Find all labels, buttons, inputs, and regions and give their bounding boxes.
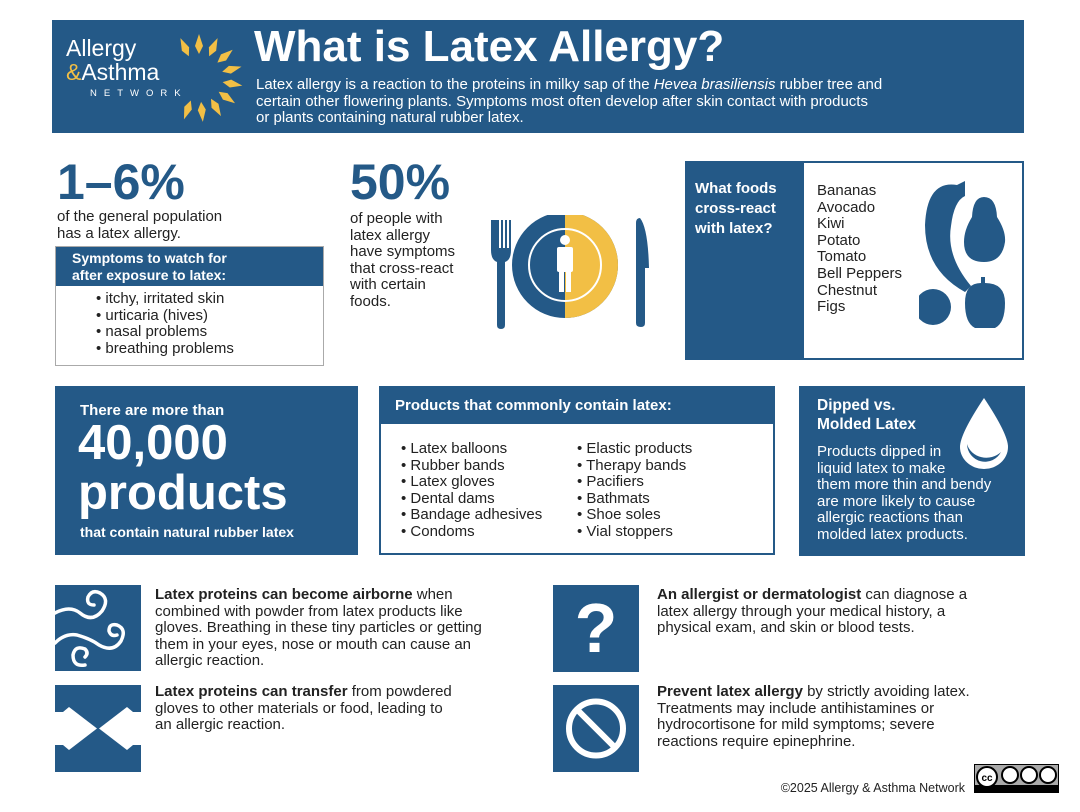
icon: creative commons badge: cc	[981, 773, 993, 784]
icon: question mark	[553, 585, 639, 672]
text: diagnose: physical exam, and skin or blood tests.	[657, 619, 915, 636]
header banner	[52, 20, 1024, 133]
icon: plate with fork and knife	[491, 215, 649, 329]
panel: dipped vs molded	[799, 386, 1025, 556]
products column 2: • Vial stoppers	[577, 522, 673, 540]
stat: 50%: latex allergy	[350, 226, 430, 244]
text: diagnose: An allergist or dermatologist can diagnose a	[657, 586, 967, 603]
stat: 50%: 50%	[350, 154, 450, 210]
products column 1: • Latex gloves	[401, 473, 495, 490]
foods list: Figs	[817, 298, 845, 315]
foods list: Tomato	[817, 248, 866, 265]
text: airborne	[155, 586, 482, 669]
stat: 1-6%: has a latex allergy.	[57, 224, 181, 242]
stat: 50%	[350, 154, 455, 310]
text: transfer: gloves to other materials or food, leading to	[155, 700, 443, 716]
text: airborne: allergic reaction.	[155, 652, 264, 669]
products column 1: • Dental dams	[401, 490, 495, 506]
products column 1: • Condoms	[401, 522, 475, 540]
symptoms list: • urticaria (hives)	[96, 306, 208, 324]
stat: 1-6%	[57, 154, 222, 242]
text: airborne: gloves. Breathing in these tiny particles or getting	[155, 619, 482, 636]
text: airborne: them in your eyes, nose or mouth can cause an	[155, 636, 471, 652]
products column 1: • Bandage adhesives	[401, 506, 542, 523]
panel: dipped vs molded: are more likely to cause	[817, 492, 975, 510]
foods list: Bell Peppers	[817, 265, 902, 282]
panel: dipped vs molded: liquid latex to make	[817, 460, 945, 476]
symptoms list: • nasal problems	[96, 323, 207, 340]
icon: transfer arrows	[55, 685, 141, 772]
products column 1: • Rubber bands	[401, 456, 505, 474]
symptoms heading	[56, 247, 323, 286]
products column 1: • Latex balloons	[401, 440, 507, 457]
logo: NETWORK	[90, 88, 188, 99]
text: diagnose: latex allergy through your medical history, a	[657, 602, 945, 620]
text: prevent: Prevent latex allergy by strictly avoiding latex.	[657, 683, 970, 700]
text: prevent: reactions require epinephrine.	[657, 732, 855, 750]
text: diagnose	[657, 586, 968, 636]
intro text: certain other flowering plants. Symptoms most often develop after skin contact with products	[256, 92, 868, 110]
products column 2: • Elastic products	[577, 440, 692, 457]
foods list: Bananas	[817, 182, 876, 199]
symptoms list	[96, 290, 234, 356]
panel: dipped vs molded: molded latex products.	[817, 526, 968, 542]
products column 2: • Bathmats	[577, 490, 650, 506]
panel: dipped vs molded: Dipped vs.	[817, 397, 895, 414]
products heading	[381, 388, 773, 424]
panel: symptoms	[55, 246, 324, 366]
text: airborne: combined with powder from latex products like	[155, 602, 463, 620]
icon: prohibition sign	[553, 685, 639, 772]
stat: 50%: have symptoms	[350, 243, 455, 260]
logo: &Asthma	[66, 59, 159, 85]
panel: 40,000 products: There are more than	[80, 402, 224, 419]
panel: dipped vs molded: Products dipped in	[817, 443, 941, 460]
logo	[66, 34, 242, 122]
symptoms heading: after exposure to latex:	[72, 266, 226, 282]
products column 2: • Therapy bands	[577, 456, 686, 474]
foods list: Kiwi	[817, 215, 845, 232]
panel: 40,000 products: products	[78, 466, 288, 520]
icon: drop	[960, 398, 1008, 469]
stat: 50%: with certain	[350, 276, 426, 293]
panel: dipped vs molded: them more thin and bendy	[817, 476, 991, 493]
icon: question mark: ?	[575, 589, 617, 667]
foods list: Potato	[817, 232, 860, 249]
products column 2: • Shoe soles	[577, 506, 661, 523]
panel: 40,000 products: that contain natural rubber latex	[80, 524, 294, 540]
panel: dipped vs molded: allergic reactions than	[817, 509, 963, 526]
panel: dipped vs molded: Molded Latex	[817, 416, 916, 433]
text: prevent: Treatments may include antihistamines or	[657, 700, 934, 716]
text: transfer	[155, 683, 452, 733]
stat: 1-6%: of the general population	[57, 208, 222, 225]
symptoms list: • itchy, irritated skin	[96, 290, 224, 307]
symptoms heading: Symptoms to watch for	[72, 250, 227, 266]
intro text: Latex allergy is a reaction to the proteins in milky sap of the Hevea brasiliensis rubber tree and	[256, 76, 882, 93]
stat: 50%: that cross-react	[350, 260, 453, 276]
products column 1	[401, 440, 542, 540]
foods list: Avocado	[817, 199, 875, 216]
foods list	[817, 182, 902, 315]
products column 2: • Pacifiers	[577, 473, 644, 490]
icons: foods	[919, 181, 1006, 328]
icon: airborne swirls	[55, 585, 141, 671]
logo: Allergy	[66, 35, 136, 61]
panel: 40,000 products	[55, 386, 358, 555]
footer copyright: ©2025 Allergy & Asthma Network	[781, 781, 965, 795]
foods question: What foods cross-react with latex?	[695, 180, 777, 237]
stat: 50%: foods.	[350, 292, 391, 310]
text: transfer: Latex proteins can transfer from powdered	[155, 683, 452, 700]
products column 2	[577, 440, 692, 540]
stat: 1-6%: 1–6%	[57, 154, 185, 210]
foods question	[687, 163, 804, 358]
products heading: Products that commonly contain latex:	[395, 397, 672, 414]
icon: creative commons badge	[974, 764, 1059, 793]
text: airborne: Latex proteins can become airborne when	[155, 586, 453, 603]
title: What is Latex Allergy?	[254, 22, 724, 71]
panel: products list	[379, 386, 775, 555]
intro text: or plants containing natural rubber latex.	[256, 109, 524, 126]
intro text	[256, 76, 882, 126]
panel: 40,000 products: 40,000	[78, 416, 228, 470]
stat: 50%: of people with	[350, 210, 443, 227]
text: prevent: hydrocortisone for mild symptoms; severe	[657, 716, 935, 733]
panel: foods	[685, 161, 1024, 360]
foods list: Chestnut	[817, 282, 877, 299]
text: prevent	[657, 683, 970, 750]
text: transfer: an allergic reaction.	[155, 716, 285, 733]
symptoms list: • breathing problems	[96, 340, 234, 356]
